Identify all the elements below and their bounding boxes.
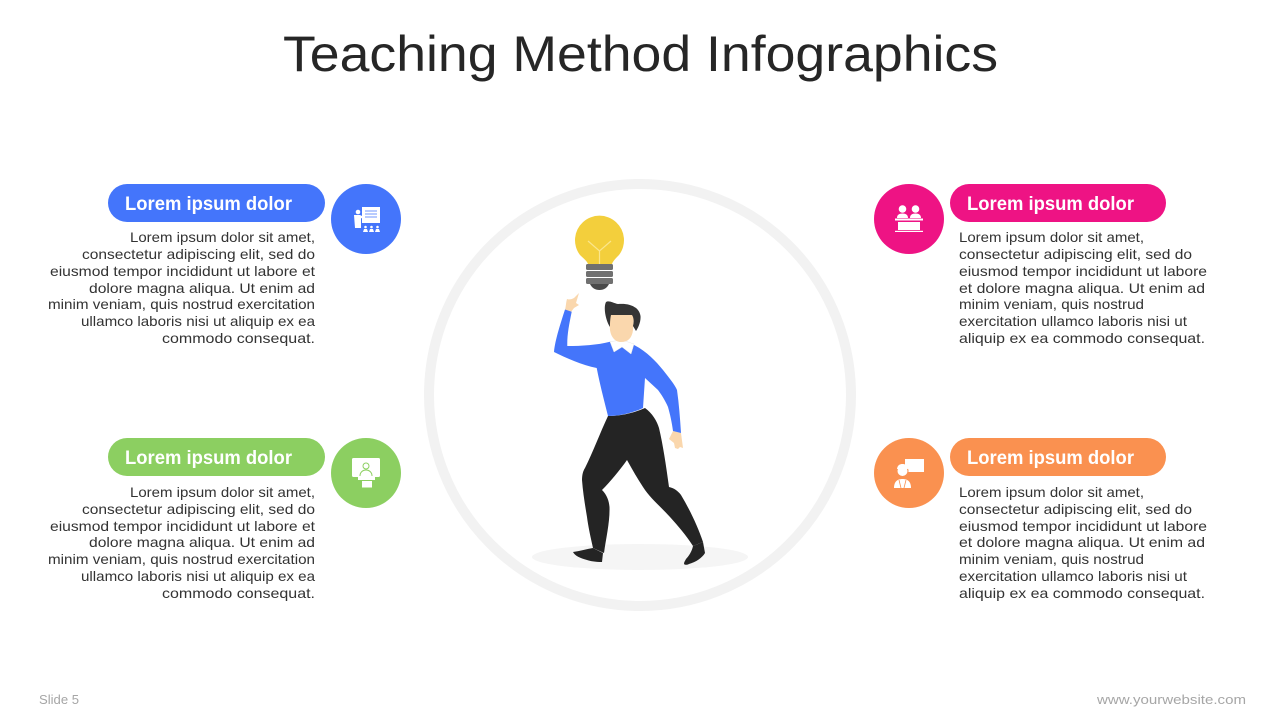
panel: top left	[48, 184, 401, 346]
body text: eiusmod tempor incididunt ut labore et	[50, 263, 315, 279]
icon: light bulb	[575, 216, 624, 290]
trousers	[582, 408, 703, 553]
left hand	[669, 431, 683, 449]
icon: speaker at podium	[331, 438, 401, 508]
body text: consectetur adipiscing elit, sed do	[959, 246, 1192, 262]
body text: ullamco laboris nisi ut aliquip ex ea	[81, 568, 315, 584]
body text: eiusmod tempor incididunt ut labore	[959, 263, 1207, 279]
right shoe	[684, 542, 705, 565]
body text: et dolore magna aliqua. Ut enim ad	[959, 534, 1205, 550]
blue sweater	[554, 310, 681, 433]
body text: minim veniam, quis nostrud exercitation	[48, 551, 315, 567]
body text: ullamco laboris nisi ut aliquip ex ea	[81, 313, 315, 329]
heading: Lorem ipsum dolor	[125, 194, 293, 215]
illustration: man with light bulb	[532, 216, 748, 570]
body text: exercitation ullamco laboris nisi ut	[959, 568, 1187, 584]
ground shadow	[532, 544, 748, 570]
icon: two people at desk	[874, 184, 944, 254]
footer: slide number: Slide 5	[39, 692, 79, 707]
heading pill	[950, 438, 1166, 476]
body text: commodo consequat.	[162, 330, 315, 346]
body text: consectetur adipiscing elit, sed do	[959, 501, 1192, 517]
title: Teaching Method Infographics	[283, 26, 998, 82]
icon: presenter at board	[331, 184, 401, 254]
body text: consectetur adipiscing elit, sed do	[82, 501, 315, 517]
icon: teacher with speech board	[874, 438, 944, 508]
body text	[48, 229, 315, 346]
body text: dolore magna aliqua. Ut enim ad	[89, 280, 315, 296]
panel: bottom right	[874, 438, 1207, 601]
hair	[605, 301, 641, 331]
heading pill	[108, 438, 325, 476]
collar	[610, 340, 634, 354]
panel: bottom left	[48, 438, 401, 601]
body text: Lorem ipsum dolor sit amet,	[959, 484, 1144, 500]
body text: dolore magna aliqua. Ut enim ad	[89, 534, 315, 550]
body text: Lorem ipsum dolor sit amet,	[959, 229, 1144, 245]
body text: et dolore magna aliqua. Ut enim ad	[959, 280, 1205, 296]
panel: top right	[874, 184, 1207, 346]
body text	[959, 484, 1207, 601]
body text	[959, 229, 1207, 346]
body text: eiusmod tempor incididunt ut labore	[959, 518, 1207, 534]
heading: Lorem ipsum dolor	[967, 448, 1135, 469]
body text	[48, 484, 315, 601]
left shoe	[573, 548, 603, 562]
body text: aliquip ex ea commodo consequat.	[959, 330, 1205, 346]
heading: Lorem ipsum dolor	[967, 194, 1135, 215]
ring around the figure	[429, 184, 851, 606]
heading: Lorem ipsum dolor	[125, 448, 293, 469]
heading pill	[950, 184, 1166, 222]
heading pill	[108, 184, 325, 222]
body text: consectetur adipiscing elit, sed do	[82, 246, 315, 262]
body text: Lorem ipsum dolor sit amet,	[130, 484, 315, 500]
face	[609, 313, 634, 342]
raised hand	[565, 293, 579, 312]
body text: minim veniam, quis nostrud	[959, 296, 1144, 312]
footer: website: www.yourwebsite.com	[1096, 692, 1246, 707]
body text: exercitation ullamco laboris nisi ut	[959, 313, 1187, 329]
body text: minim veniam, quis nostrud exercitation	[48, 296, 315, 312]
body text: eiusmod tempor incididunt ut labore et	[50, 518, 315, 534]
body text: minim veniam, quis nostrud	[959, 551, 1144, 567]
body text: aliquip ex ea commodo consequat.	[959, 585, 1205, 601]
body text: commodo consequat.	[162, 585, 315, 601]
body text: Lorem ipsum dolor sit amet,	[130, 229, 315, 245]
